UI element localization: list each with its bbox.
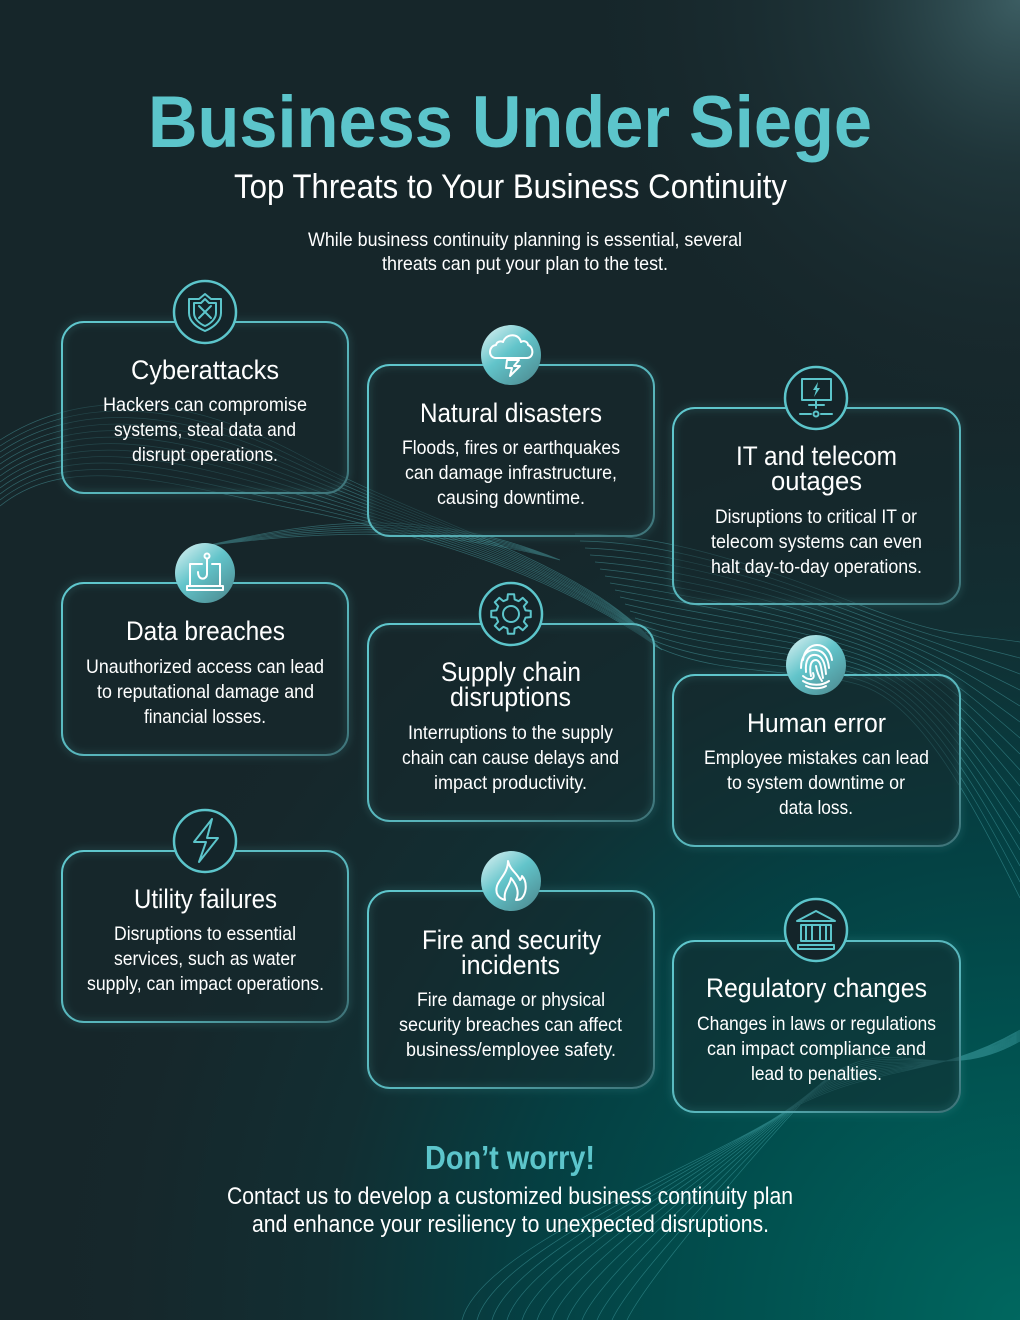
card title: Regulatory changes [706, 973, 927, 1003]
card body: Fire damage or physical [417, 989, 605, 1011]
panel: supply chain disruptions [368, 583, 654, 821]
card body [86, 656, 324, 728]
icon: shield with x [174, 281, 236, 343]
card body: Floods, fires or earthquakes [402, 437, 620, 459]
card body [711, 506, 922, 578]
icon: monitor with network [785, 367, 847, 429]
intro text: While business continuity planning is essential, several [308, 229, 742, 251]
card body [697, 1013, 936, 1085]
card body: lead to penalties. [751, 1063, 882, 1085]
card title: disruptions [450, 682, 571, 712]
card title: outages [771, 466, 862, 496]
panel: natural disasters [368, 325, 654, 536]
card body: security breaches can affect [399, 1014, 623, 1036]
panel: fire and security incidents [368, 851, 654, 1088]
card body: halt day-to-day operations. [711, 556, 922, 578]
card body: can impact compliance and [707, 1038, 926, 1060]
card body: causing downtime. [437, 487, 585, 509]
card body: to system downtime or [727, 772, 905, 794]
panel: human error [673, 635, 960, 846]
card title: Cyberattacks [131, 355, 279, 385]
closing text: Contact us to develop a customized business continuity plan [227, 1183, 793, 1210]
closing text: and enhance your resiliency to unexpected disruptions. [252, 1211, 769, 1238]
icon: institution building [785, 899, 847, 961]
card body: data loss. [779, 797, 853, 819]
card title: IT and telecom [736, 441, 897, 471]
card title: Utility failures [134, 884, 277, 914]
card body [704, 747, 929, 819]
card body: Changes in laws or regulations [697, 1013, 936, 1035]
card body: Employee mistakes can lead [704, 747, 929, 769]
card body [402, 437, 620, 509]
card title: Data breaches [126, 616, 285, 646]
card body: supply, can impact operations. [87, 973, 324, 995]
card title: Human error [747, 708, 886, 738]
card title: Supply chain [441, 657, 581, 687]
card body: business/employee safety. [406, 1039, 616, 1061]
card body: Interruptions to the supply [408, 722, 613, 744]
panel: IT and telecom outages [673, 367, 960, 604]
card title [441, 657, 581, 712]
card body: services, such as water [114, 948, 296, 970]
card body: Hackers can compromise [103, 394, 307, 416]
panel: cyberattacks [62, 281, 348, 493]
card body: impact productivity. [434, 772, 587, 794]
card body: chain can cause delays and [402, 747, 619, 769]
card body: Unauthorized access can lead [86, 656, 324, 678]
card body [402, 722, 619, 794]
icon: storm cloud [481, 325, 541, 385]
card body: to reputational damage and [97, 681, 314, 703]
card title [422, 925, 601, 980]
panel: utility failures [62, 810, 348, 1022]
card title [736, 441, 897, 496]
panel: data breaches [62, 543, 348, 755]
card body: Disruptions to critical IT or [715, 506, 917, 528]
card body: Disruptions to essential [114, 923, 296, 945]
card body [399, 989, 623, 1061]
card body: financial losses. [144, 706, 266, 728]
panel: regulatory changes [673, 899, 960, 1112]
card body: disrupt operations. [132, 444, 278, 466]
title: Business Under Siege [148, 82, 872, 163]
decorative wave ribbons [0, 404, 1020, 1320]
card body [103, 394, 307, 466]
intro text: threats can put your plan to the test. [382, 253, 668, 275]
card title: incidents [461, 950, 560, 980]
closing text [227, 1183, 793, 1238]
closing heading: Don’t worry! [425, 1139, 595, 1176]
card body: systems, steal data and [114, 419, 296, 441]
icon: flame [481, 851, 541, 911]
icon: laptop with hook [175, 543, 235, 603]
card body: can damage infrastructure, [405, 462, 617, 484]
card title: Fire and security [422, 925, 601, 955]
card body: telecom systems can even [711, 531, 922, 553]
icon: lightning bolt [174, 810, 236, 872]
subtitle: Top Threats to Your Business Continuity [234, 168, 787, 206]
icon: gear [480, 583, 542, 645]
icon: fingerprint [786, 635, 846, 695]
intro text [308, 229, 742, 275]
card body [87, 923, 324, 995]
card title: Natural disasters [420, 398, 602, 428]
